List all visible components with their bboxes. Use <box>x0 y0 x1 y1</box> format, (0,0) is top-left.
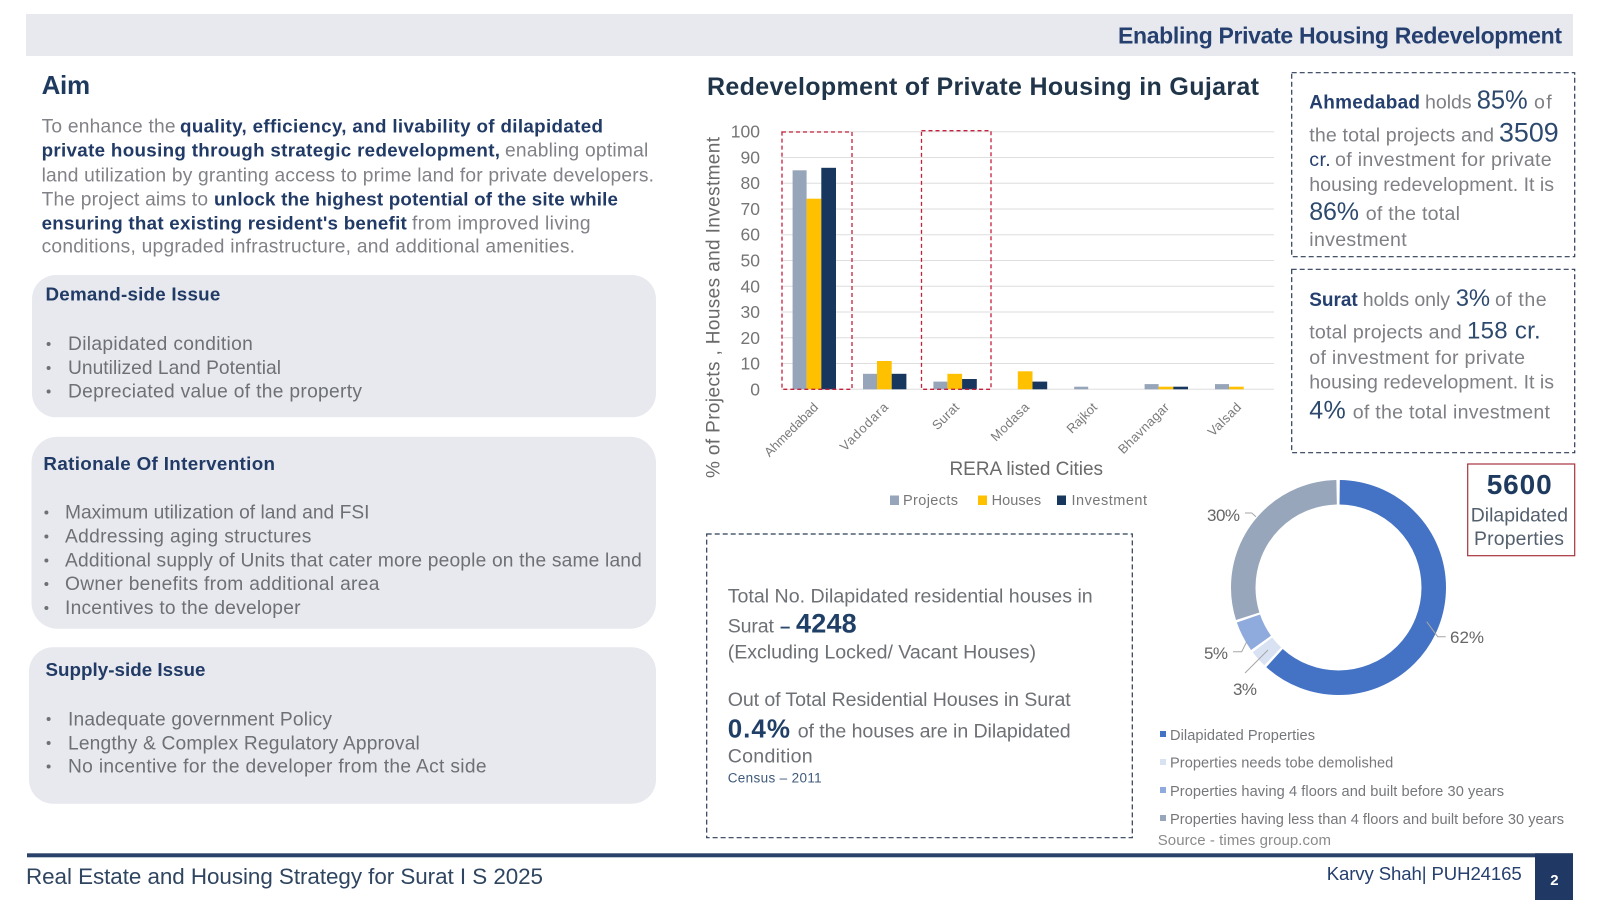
callout: Surat: 3% <box>1456 285 1490 312</box>
y axis tick labels: 70 <box>741 199 760 219</box>
callout: Ahmedabad: cr. <box>1309 149 1331 171</box>
y axis title: % of Projects , Houses and Investment <box>704 136 724 478</box>
callout: Surat: of investment for private <box>1309 347 1525 369</box>
callout: Ahmedabad: 3509 <box>1499 118 1559 148</box>
footer: Karvy Shah| PUH24165 <box>1327 863 1522 884</box>
city labels: Surat <box>929 399 962 433</box>
callout: dilapidated houses in Surat <box>707 534 1132 838</box>
panel: supply-side issue: No incentive for the developer from the Act side <box>68 757 486 778</box>
chart title: Redevelopment of Private Housing in Gujarat <box>707 73 1260 101</box>
city labels: Vadodara <box>837 399 892 454</box>
y axis tick labels: 20 <box>741 328 760 348</box>
panel: rationale of intervention: Addressing aging structures <box>65 527 311 548</box>
callout: Surat: Surat <box>1309 290 1358 311</box>
panel: demand-side issue: Demand-side Issue <box>46 284 220 305</box>
callout: Surat: holds only <box>1363 289 1450 311</box>
callout: dilapidated houses in Surat: Census – 2011 <box>728 771 822 786</box>
donut legend <box>1160 728 1564 828</box>
callout: Surat: total projects and <box>1309 322 1462 344</box>
callout: Surat: 4% <box>1309 396 1346 424</box>
source note: Source - times group.com <box>1158 832 1331 849</box>
donut chart: 5% <box>1204 644 1228 663</box>
chart legend: Houses <box>992 493 1041 509</box>
aim paragraph: quality, efficiency, and livability of dilapidated <box>180 116 603 137</box>
city labels <box>761 399 1244 460</box>
callout: Ahmedabad: holds <box>1425 91 1472 113</box>
callout: Surat: housing redevelopment. It is <box>1309 371 1554 393</box>
y axis tick labels: 10 <box>741 354 760 374</box>
panel: demand-side issue: Depreciated value of the property <box>68 382 362 403</box>
city labels: Ahmedabad <box>761 400 821 460</box>
aim paragraph: ensuring that existing resident's benefit <box>42 212 408 233</box>
footer <box>26 853 1573 900</box>
callout: Surat: 158 cr. <box>1467 318 1541 345</box>
callout: Ahmedabad: housing redevelopment. It is <box>1309 174 1554 196</box>
page number <box>1535 853 1573 900</box>
city labels: Rajkot <box>1063 399 1100 436</box>
callout: Ahmedabad: investment <box>1309 229 1407 251</box>
panel: supply-side issue: Inadequate government Policy <box>68 709 332 730</box>
donut legend: Properties having less than 4 floors and built before 30 years <box>1170 812 1564 828</box>
callout: 5600 dilapidated properties: Dilapidated <box>1471 505 1568 527</box>
callout: Ahmedabad: of <box>1534 91 1552 113</box>
city labels: Bhavnagar <box>1115 399 1173 457</box>
panel: demand-side issue <box>32 275 656 417</box>
donut legend: Dilapidated Properties <box>1170 728 1315 744</box>
callout: Ahmedabad: of the total <box>1366 203 1460 225</box>
callout: Ahmedabad: 86% <box>1309 198 1359 226</box>
bars: houses <box>807 199 1244 389</box>
panel: rationale of intervention: Maximum utilization of land and FSI <box>65 503 370 524</box>
donut chart: 62% <box>1450 628 1484 647</box>
callout: dilapidated houses in Surat: 0.4% <box>728 713 790 743</box>
y axis tick labels: 80 <box>741 173 760 193</box>
panel: rationale of intervention: Incentives to the developer <box>65 598 301 619</box>
aim paragraph: from improved living <box>412 213 591 234</box>
donut legend: Properties having 4 floors and built before 30 years <box>1170 784 1504 800</box>
aim heading: Aim <box>42 70 90 100</box>
y axis tick labels: 40 <box>741 276 760 296</box>
y axis tick labels: 90 <box>741 148 760 168</box>
city labels: Modasa <box>988 399 1033 444</box>
panel: rationale of intervention <box>32 437 656 629</box>
callout: dilapidated houses in Surat: Total No. Dilapidated residential houses in <box>728 585 1093 607</box>
callout: 5600 dilapidated properties: Properties <box>1474 528 1564 550</box>
y axis tick labels: 30 <box>741 302 760 322</box>
callout: dilapidated houses in Surat: Out of Total Residential Houses in Surat <box>728 689 1071 711</box>
aim paragraph: enabling optimal <box>505 141 648 162</box>
callout: dilapidated houses in Surat: Surat <box>728 615 775 637</box>
callout: Ahmedabad <box>1292 73 1575 257</box>
callout: dilapidated houses in Surat: 4248 <box>796 608 857 638</box>
chart legend: Projects <box>903 493 958 509</box>
aim paragraph: unlock the highest potential of the site while <box>214 188 618 209</box>
footer: Real Estate and Housing Strategy for Surat I S 2025 <box>26 864 543 889</box>
callout: dilapidated houses in Surat: – <box>780 615 790 636</box>
aim paragraph: land utilization by granting access to prime land for private developers. <box>42 165 654 186</box>
aim paragraph: The project aims to <box>42 189 208 210</box>
callout: Surat <box>1292 269 1575 453</box>
aim paragraph <box>42 116 654 258</box>
panel: demand-side issue: Unutilized Land Potential <box>68 358 281 379</box>
highlight: Surat <box>922 131 991 389</box>
callout: Ahmedabad: 85% <box>1477 86 1528 114</box>
donut chart <box>1204 492 1484 699</box>
highlight: Ahmedabad <box>782 132 852 389</box>
y axis tick labels <box>731 122 760 399</box>
header bar: Enabling Private Housing Redevelopment <box>1118 22 1562 48</box>
x axis title: RERA listed Cities <box>950 459 1103 480</box>
callout: dilapidated houses in Surat: of the houses are in Dilapidated <box>798 720 1071 742</box>
bars: investment <box>821 168 1188 389</box>
chart legend: Investment <box>1072 493 1147 509</box>
donut chart: 30% <box>1207 506 1240 525</box>
panel: demand-side issue: Dilapidated condition <box>68 334 253 355</box>
callout: 5600 dilapidated properties <box>1468 464 1575 556</box>
callout: 5600 dilapidated properties: 5600 <box>1487 469 1552 500</box>
callout: Surat: of the <box>1495 289 1547 311</box>
aim paragraph: private housing through strategic redevelopment, <box>42 140 500 161</box>
callout: dilapidated houses in Surat: (Excluding Locked/ Vacant Houses) <box>728 641 1036 663</box>
panel: supply-side issue <box>29 647 656 804</box>
y axis tick labels: 60 <box>741 225 760 245</box>
panel: supply-side issue: Supply-side Issue <box>46 659 206 680</box>
y axis tick labels: 50 <box>741 250 760 270</box>
page number: 2 <box>1550 872 1559 889</box>
bar chart <box>704 122 1274 509</box>
panel: rationale of intervention: Owner benefits from additional area <box>65 574 380 595</box>
donut chart: 3% <box>1233 680 1257 699</box>
panel: rationale of intervention: Additional supply of Units that cater more people on the same land <box>65 551 642 572</box>
callout: Ahmedabad: of investment for private <box>1335 149 1552 171</box>
panel: supply-side issue: Lengthy & Complex Regulatory Approval <box>68 733 420 754</box>
y axis tick labels: 0 <box>750 379 760 399</box>
callout: dilapidated houses in Surat: Condition <box>728 745 813 767</box>
aim paragraph: conditions, upgraded infrastructure, and additional amenities. <box>42 237 575 258</box>
city labels: Valsad <box>1205 400 1244 439</box>
donut legend: Properties needs tobe demolished <box>1170 755 1393 771</box>
panel: rationale of intervention: Rationale Of Intervention <box>43 453 275 474</box>
aim paragraph: To enhance the <box>42 117 176 138</box>
chart legend <box>890 493 1147 509</box>
callout: Ahmedabad: Ahmedabad <box>1309 92 1420 113</box>
callout: Ahmedabad: the total projects and <box>1309 125 1494 147</box>
callout: Surat: of the total investment <box>1353 401 1551 423</box>
header bar <box>26 14 1573 56</box>
y axis tick labels: 100 <box>731 122 760 142</box>
bars: projects <box>793 170 1229 389</box>
